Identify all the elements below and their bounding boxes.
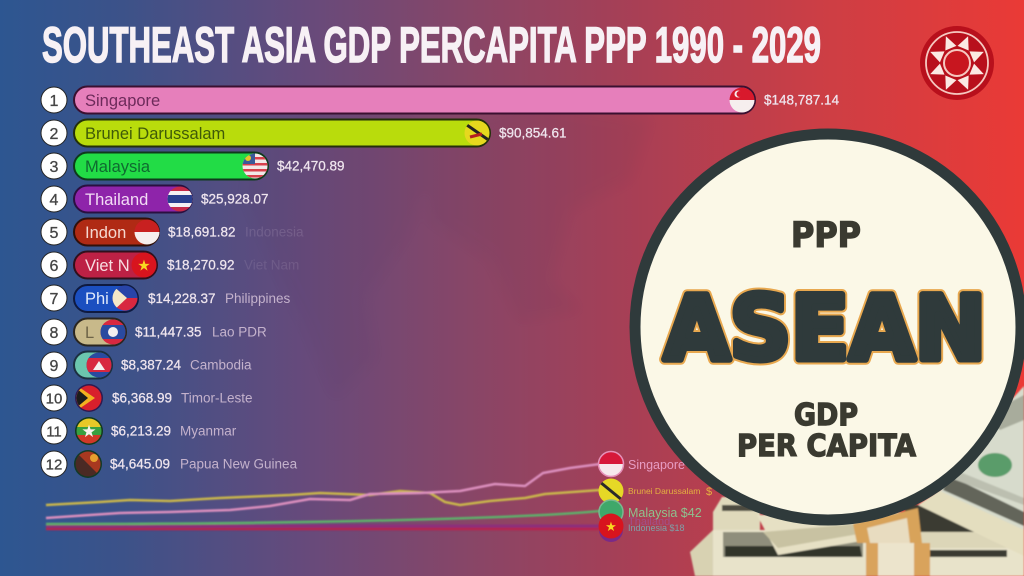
line labels and flags: ★: [605, 519, 617, 534]
line labels and flags: Indonesia $18: [628, 523, 685, 533]
GDP label: GDP: [794, 398, 858, 433]
row 9: Cambodia: Cambodia: [190, 358, 252, 372]
panel: ASEAN badge: [635, 134, 1021, 520]
line chart: history: [46, 464, 600, 529]
row 8: Lao PDR: 8: [50, 325, 59, 342]
row 9: Cambodia: $8,387.24: [121, 358, 182, 372]
row 8: Lao PDR: $11,447.35: [135, 324, 202, 340]
tilted stack right: [918, 490, 1024, 556]
PER CAPITA label: PER CAPITA: [737, 429, 917, 464]
row 9: Cambodia: [41, 352, 252, 378]
row 7: Philippines: 7: [50, 291, 59, 308]
row 7: Philippines: Phi: [85, 290, 109, 308]
row 1: Singapore: [41, 86, 840, 114]
bar chart: ranking: [41, 86, 840, 478]
row 6: Viet Nam: [41, 252, 299, 278]
ASEAN wordmark: ASEAN: [664, 277, 986, 380]
row 4: Thailand: [41, 186, 269, 212]
row 9: Cambodia: 9: [50, 358, 59, 375]
money stacks: [690, 386, 1024, 576]
row 1: Singapore: 1: [50, 93, 59, 110]
row 4: Thailand: Thailand: [85, 191, 148, 209]
row 12: Papua New Guinea: Papua New Guinea: [180, 456, 298, 472]
row 11: Myanmar: Myanmar: [180, 424, 237, 438]
row 10: Timor-Leste: $6,368.99: [112, 390, 172, 406]
line labels and flags: Brunei Darussalam: [628, 486, 700, 496]
upper band: [853, 508, 922, 543]
icon: sun logo: [920, 26, 994, 100]
row 2: Brunei Darussalam: [41, 120, 567, 146]
row 6: Viet Nam: Viet N: [85, 257, 130, 275]
row 3: Malaysia: [41, 152, 345, 180]
row 5: Indonesia: [41, 218, 304, 246]
row 10: Timor-Leste: Timor-Leste: [181, 390, 253, 406]
row 11: Myanmar: [41, 417, 237, 445]
row 3: Malaysia: Malaysia: [85, 158, 151, 176]
row 8: Lao PDR: [41, 318, 267, 346]
row 1: Singapore: $148,787.14: [764, 92, 840, 108]
line labels and flags: Thailand: [628, 516, 670, 528]
dark gap: [905, 505, 985, 532]
ASEAN wordmark: ASEAN: [664, 277, 986, 380]
row 5: Indonesia: 5: [50, 225, 59, 242]
row 6: Viet Nam: 6: [50, 258, 59, 275]
upper left stack: [713, 497, 760, 530]
line labels and flags: [598, 451, 712, 542]
banknote seal: [978, 453, 1012, 477]
row 12: Papua New Guinea: $4,645.09: [110, 456, 170, 472]
tilted stack: [757, 512, 910, 555]
bottom stack printed face: [723, 532, 863, 557]
row 11: Myanmar: $6,213.29: [111, 424, 171, 438]
line labels and flags: Malaysia $42: [628, 506, 702, 520]
row 10: Timor-Leste: 10: [46, 390, 62, 408]
row 8: Lao PDR: L: [85, 324, 94, 342]
row 11: Myanmar: ★: [81, 422, 97, 441]
row 12: Papua New Guinea: [41, 450, 298, 478]
bottom stack side and body: [690, 530, 1024, 576]
lower band: [866, 543, 930, 576]
row 2: Brunei Darussalam: 2: [50, 126, 59, 143]
row 6: Viet Nam: ★: [137, 258, 151, 274]
PPP label: PPP: [791, 216, 861, 256]
row 2: Brunei Darussalam: $90,854.61: [499, 126, 567, 140]
row 7: Philippines: Philippines: [225, 291, 291, 306]
row 4: Thailand: 4: [50, 192, 59, 209]
line labels and flags: Singapore: [628, 458, 685, 472]
row 11: Myanmar: 11: [46, 424, 62, 440]
line labels and flags: $: [706, 486, 712, 498]
row 4: Thailand: $25,928.07: [201, 192, 269, 206]
row 6: Viet Nam: $18,270.92: [167, 258, 235, 272]
row 1: Singapore: Singapore: [85, 92, 160, 110]
row 7: Philippines: $14,228.37: [148, 291, 216, 306]
row 12: Papua New Guinea: 12: [46, 456, 62, 474]
row 6: Viet Nam: Viet Nam: [244, 258, 299, 272]
row 10: Timor-Leste: [41, 384, 253, 412]
row 2: Brunei Darussalam: Brunei Darussalam: [85, 125, 225, 143]
row 3: Malaysia: 3: [50, 159, 59, 176]
row 5: Indonesia: $18,691.82: [168, 224, 236, 240]
world map backdrop: [245, 100, 650, 397]
row 3: Malaysia: $42,470.89: [277, 158, 345, 174]
row 5: Indonesia: Indon: [85, 224, 126, 242]
row 5: Indonesia: Indonesia: [245, 224, 304, 240]
row 7: Philippines: [41, 285, 291, 312]
row 8: Lao PDR: Lao PDR: [212, 324, 267, 340]
